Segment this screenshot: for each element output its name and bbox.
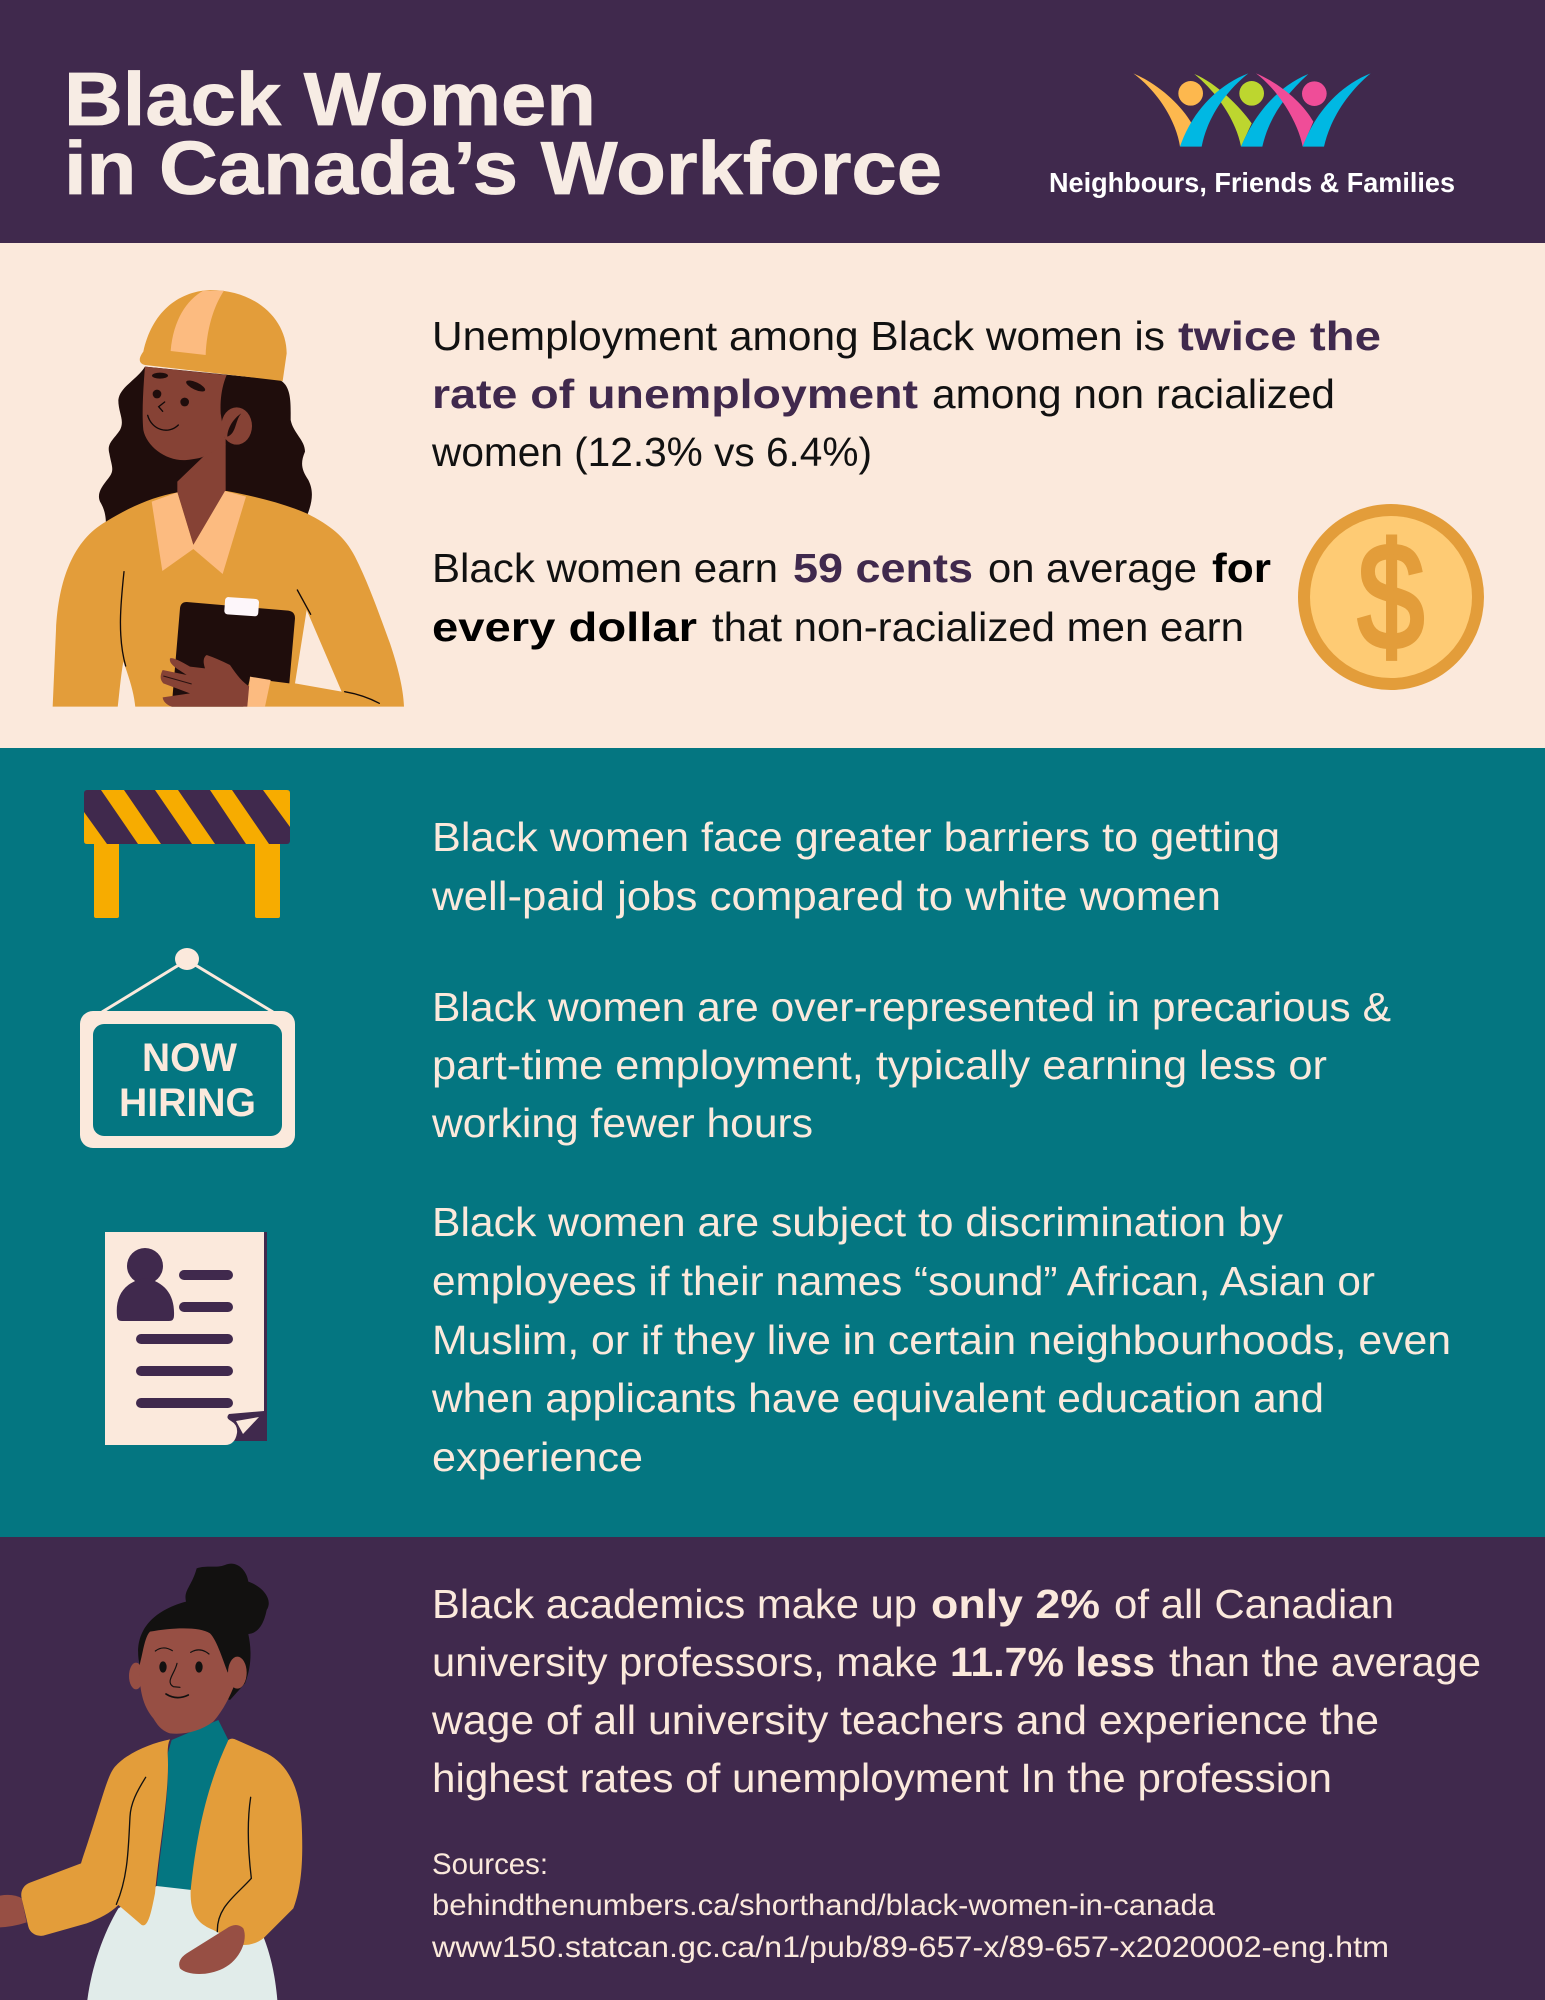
text block: barriers to well-paid jobs: Black women face greater barriers to getting <box>432 814 1280 860</box>
panel: academics and sources <box>0 1537 1545 2000</box>
text block: unemployment rate: twice the <box>1178 313 1381 359</box>
text block: wage gap: Black women earn <box>432 545 778 591</box>
text block: Black academics: of all Canadian <box>1114 1581 1394 1627</box>
text block: barriers to well-paid jobs: well-paid jobs compared to white women <box>431 873 1221 919</box>
text block: discrimination: Black women are subject to discrimination by <box>432 1199 1284 1245</box>
icon: resume document <box>105 1232 267 1445</box>
text block: Black academics: than the average <box>1169 1639 1481 1685</box>
text block: wage gap: for <box>1212 545 1271 591</box>
text block: precarious employment <box>431 984 1391 1146</box>
text block: Black academics: only 2% <box>931 1581 1100 1627</box>
text block: unemployment rate: rate of unemployment <box>432 371 918 417</box>
text block: discrimination: Muslim, or if they live in certain neighbourhoods, even <box>432 1317 1451 1363</box>
title: Black Women <box>64 57 596 141</box>
logo: Neighbours, Friends & Families <box>1049 73 1455 198</box>
text block: wage gap <box>432 545 1271 650</box>
text block: wage gap: that non-racialized men earn <box>712 604 1244 650</box>
text block: wage gap: every dollar <box>432 604 697 650</box>
panel: header <box>0 0 1545 243</box>
panel: barriers <box>0 748 1545 1537</box>
title <box>64 57 942 210</box>
text block: Black academics: university professors, make <box>432 1639 938 1685</box>
text block: Black academics: wage of all university teachers and experience the <box>431 1697 1379 1743</box>
text block: sources: Sources: <box>432 1848 548 1881</box>
text block: wage gap: on average <box>988 545 1197 591</box>
text block: precarious employment: part-time employment, typically earning less or <box>432 1042 1327 1088</box>
icon: dollar coin <box>1298 504 1484 690</box>
text block: discrimination: employees if their names “sound” African, Asian or <box>432 1258 1375 1304</box>
text block: wage gap: 59 cents <box>793 545 973 591</box>
text block: unemployment rate: among non racialized <box>932 371 1335 417</box>
text block: precarious employment: working fewer hours <box>431 1100 813 1146</box>
text block: Black academics: Black academics make up <box>432 1581 917 1627</box>
icon: woman with hair bun <box>0 1564 302 2000</box>
text block: discrimination <box>431 1199 1451 1480</box>
icon: now hiring sign: NOW <box>142 1036 237 1080</box>
text block: Black academics: highest rates of unemployment In the profession <box>432 1755 1332 1801</box>
title: in Canada’s Workforce <box>64 126 942 210</box>
text block: Black academics <box>431 1581 1481 1801</box>
text block: sources: www150.statcan.gc.ca/n1/pub/89-657-x/89-657-x2020002-eng.htm <box>431 1931 1389 1964</box>
icon: now hiring sign <box>80 948 295 1148</box>
panel: unemployment and wages <box>0 243 1545 748</box>
text block: discrimination: when applicants have equivalent education and <box>431 1375 1324 1421</box>
text block: barriers to well-paid jobs <box>431 814 1280 919</box>
text block: unemployment rate <box>431 313 1381 475</box>
logo: Neighbours, Friends & Families: Neighbours, Friends & Families <box>1049 167 1455 198</box>
text block: sources <box>431 1848 1389 1964</box>
text block: Black academics: 11.7% less <box>950 1639 1155 1685</box>
text block: sources: behindthenumbers.ca/shorthand/black-women-in-canada <box>432 1889 1215 1922</box>
text block: discrimination: experience <box>432 1434 643 1480</box>
icon: now hiring sign: HIRING <box>119 1081 256 1125</box>
icon: woman with hard hat and clipboard <box>53 290 404 707</box>
text block: unemployment rate: women (12.3% vs 6.4%) <box>431 429 872 475</box>
icon: road barrier <box>84 790 290 918</box>
text block: precarious employment: Black women are over-represented in precarious & <box>432 984 1391 1030</box>
text block: unemployment rate: Unemployment among Black women is <box>432 313 1165 359</box>
icon: dollar coin: $ <box>1358 512 1424 680</box>
